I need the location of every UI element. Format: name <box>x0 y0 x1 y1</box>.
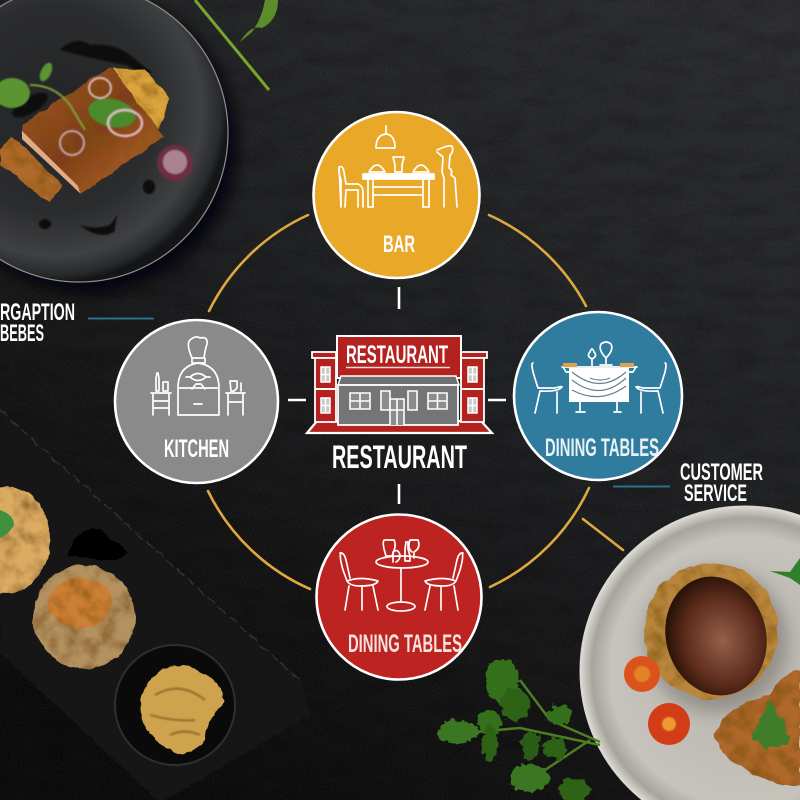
connecting arc: bottom left <box>208 491 310 589</box>
right wing <box>461 352 487 422</box>
photo: herb sprig top <box>195 0 278 90</box>
connecting arc: top right <box>489 215 586 306</box>
icon: bar table <box>339 126 457 207</box>
callout: customer service: SERVICE <box>684 480 747 507</box>
callout: customer service <box>613 459 763 507</box>
center: restaurant building icon <box>307 336 492 433</box>
sign board <box>337 336 461 378</box>
connecting arc: bottom right <box>490 488 589 587</box>
photo: parsley sprig <box>438 658 600 800</box>
label: bar: BAR <box>383 231 415 258</box>
building base <box>307 421 492 433</box>
node: kitchen <box>115 320 278 483</box>
centre connector ticks <box>288 287 506 504</box>
facade <box>338 385 458 425</box>
icon: dining table with cloth <box>532 342 666 413</box>
label: dining tables blue: DINING TABLES <box>545 434 659 462</box>
photo: slate board with fritters and mustard <box>0 410 310 800</box>
center title: RESTAURANT <box>332 439 467 475</box>
connecting arc: top left <box>209 215 308 311</box>
label: kitchen: KITCHEN <box>164 435 229 463</box>
node: dining tables blue <box>514 312 682 480</box>
callout: left garbled label: RGAPTION <box>0 299 75 326</box>
callout: left garbled label: BEBES <box>0 320 44 347</box>
sign board: RESTAURANT <box>346 341 448 369</box>
roof <box>338 376 459 385</box>
photo: dark plate with pork and herbs <box>0 0 238 293</box>
callout: left garbled label <box>0 299 154 347</box>
icon: kitchen oven and chef hat <box>151 337 245 415</box>
icon: bistro table with chairs <box>340 540 463 611</box>
node: bar <box>314 112 480 278</box>
photo: white plate with steak and tomatoes <box>580 506 800 800</box>
connector to customer plate <box>583 519 623 550</box>
label: dining tables red: DINING TABLES <box>348 630 462 658</box>
node: dining tables red <box>316 514 482 680</box>
left wing <box>312 352 336 422</box>
